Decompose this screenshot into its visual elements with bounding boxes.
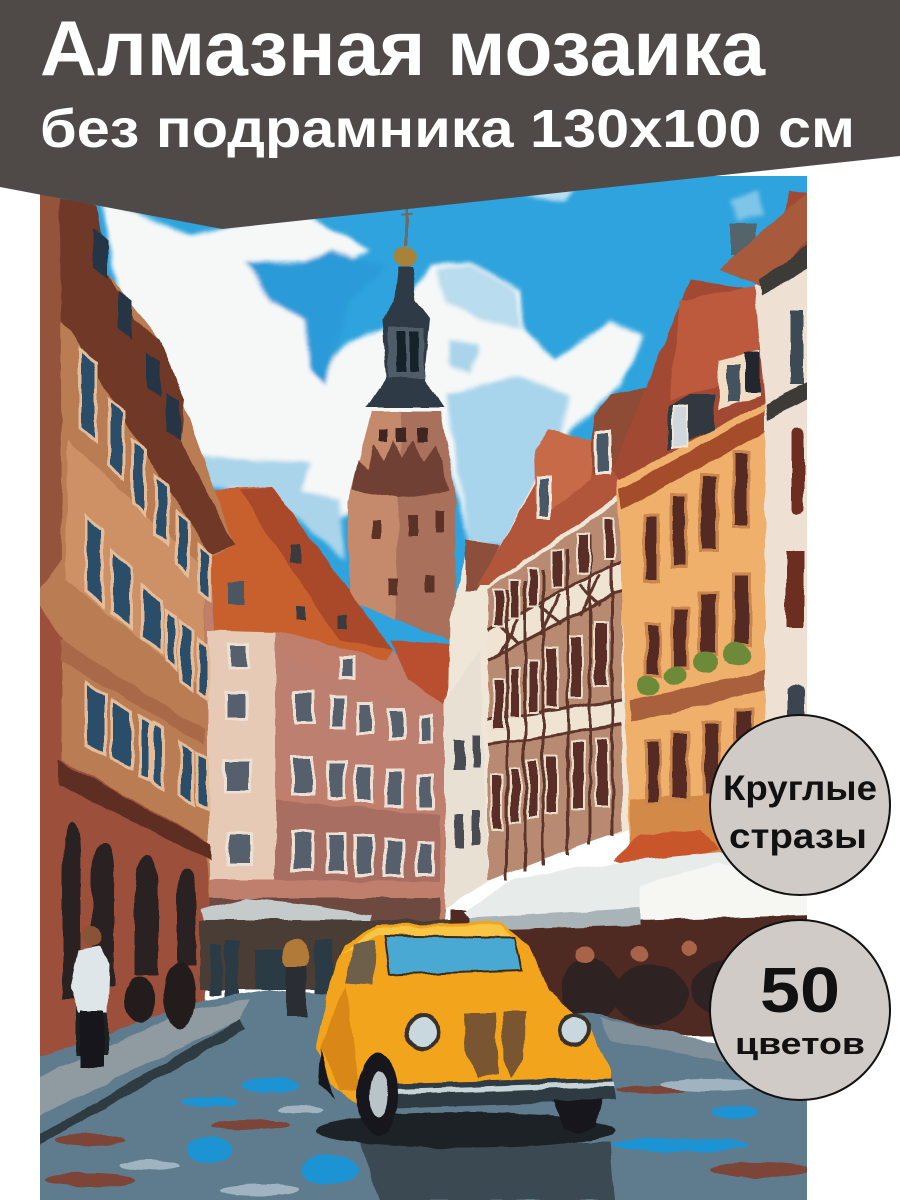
header banner	[0, 0, 900, 229]
badge: 50 colours: 50	[760, 954, 840, 1026]
sky with clouds	[60, 176, 807, 655]
yellow building	[612, 190, 815, 868]
center pink building	[204, 486, 458, 925]
church tower	[347, 205, 458, 645]
badge: 50 colours	[710, 920, 890, 1100]
car grille	[463, 1012, 498, 1078]
cobblestone dabs	[45, 1086, 810, 1194]
center building windows	[224, 644, 433, 876]
far right building	[720, 194, 807, 722]
yellow car	[315, 922, 615, 1148]
timber windows	[492, 518, 614, 830]
badge: round rhinestones: Круглые	[723, 769, 877, 808]
street cafes and crowd	[200, 852, 815, 1035]
title: Алмазная мозаика	[40, 4, 766, 92]
painting: European old town street with yellow car	[30, 170, 820, 1200]
half-timbered building	[445, 385, 655, 910]
left building	[30, 190, 235, 1065]
person in hat	[282, 939, 310, 1016]
yellow building windows	[645, 452, 753, 804]
subtitle: без подрамника 130х100 см	[40, 99, 855, 159]
badge: 50 colours: цветов	[735, 1026, 865, 1061]
badge: round rhinestones: стразы	[729, 817, 867, 856]
street	[30, 990, 815, 1200]
badge: round rhinestones	[710, 715, 890, 895]
puddles	[182, 1077, 759, 1185]
seated figures by the arches	[124, 961, 196, 1029]
timber frame beams	[488, 520, 622, 880]
arches	[62, 822, 196, 1000]
pedestrian in white shirt	[70, 926, 110, 1068]
left building upper windows	[80, 350, 210, 810]
flower boxes	[637, 642, 750, 695]
